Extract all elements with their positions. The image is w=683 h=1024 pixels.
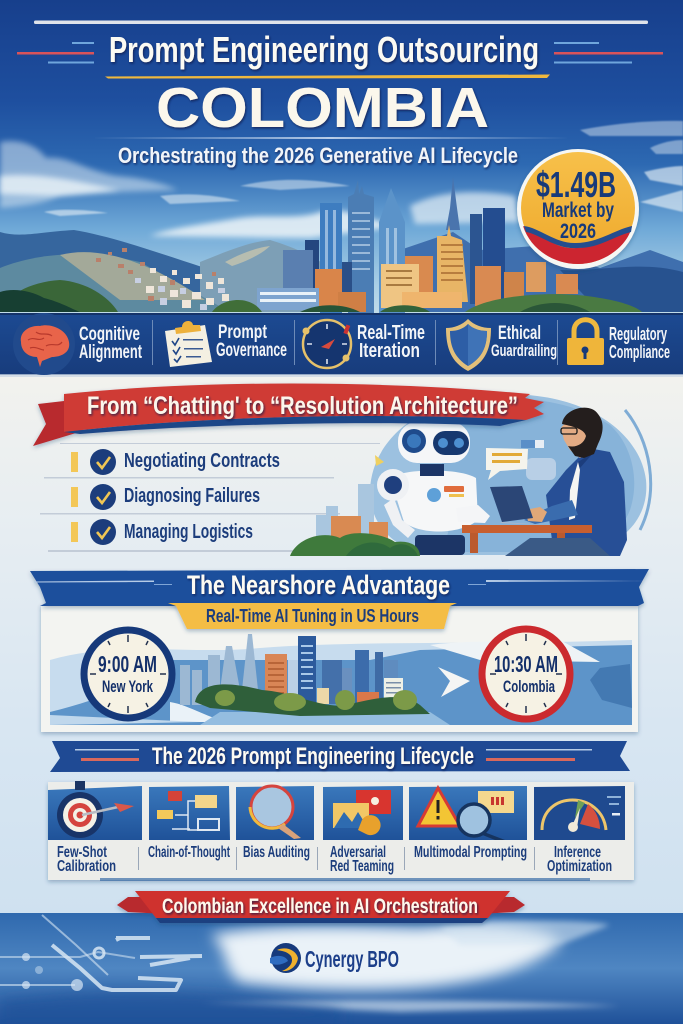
heading: nearshore advantage: The Nearshore Advantage: [187, 570, 450, 600]
banner: lifecycle heading: [50, 741, 630, 772]
label: Real-Time Iteration: Iteration: [359, 340, 420, 362]
panel: lifecycle card: [48, 782, 634, 880]
clock: Colombia: Colombia: [503, 677, 555, 696]
tile: few-shot calibration: Calibration: [57, 858, 116, 875]
label: Ethical Guardrailing: [491, 323, 557, 360]
market badge: $1.49B: [536, 164, 616, 205]
list item: managing logistics: Managing Logistics: [124, 521, 253, 543]
list item: diagnosing failures: Diagnosing Failures: [124, 485, 260, 507]
footer background: [0, 913, 683, 1024]
city skyline: [257, 177, 578, 313]
tile: inference optimization: [534, 786, 625, 875]
market badge: [517, 149, 639, 269]
clock: New York: 9:00 AM: [98, 651, 157, 677]
footer ribbon: [117, 891, 525, 923]
logo: Cynergy BPO: [270, 943, 399, 973]
list item: negotiating contracts: [71, 449, 280, 475]
tile: bias auditing: [236, 786, 314, 861]
panel: resolution architecture: [33, 384, 651, 556]
label: Prompt Governance: Prompt: [218, 322, 267, 343]
tile: adversarial red teaming: Adversarial: [330, 844, 386, 861]
tile: multimodal prompting: Multimodal Prompting: [414, 844, 527, 861]
clock: Colombia: [482, 629, 570, 719]
tile: few-shot calibration: Few-Shot: [57, 844, 107, 861]
circuit pattern: [0, 915, 202, 991]
icon: clipboard: [165, 321, 212, 367]
banner: red ribbon: [33, 384, 544, 446]
tile: adversarial red teaming: [323, 786, 403, 875]
clock: New York: [84, 630, 172, 718]
label: Prompt Governance: [216, 322, 287, 361]
tile: chain-of-thought: [148, 786, 230, 861]
background: hero sky: [0, 0, 683, 316]
icon: brain: [13, 313, 75, 375]
label: Ethical Guardrailing: Guardrailing: [491, 341, 557, 360]
label: Cognitive Alignment: Alignment: [79, 342, 142, 363]
title decorative lines: [17, 20, 663, 64]
feature band: [0, 313, 683, 377]
heading: country: COLOMBIA: [156, 76, 489, 140]
market badge: Market by: [542, 199, 614, 222]
mountains: [0, 230, 683, 312]
label: Real-Time Iteration: Real-Time: [357, 322, 425, 344]
title underline: [105, 74, 550, 78]
tile: few-shot calibration: [48, 781, 142, 875]
treeline: [0, 280, 642, 312]
footer heading: Colombian Excellence in AI Orchestration: [162, 895, 478, 918]
banner: yellow subtitle: Real-Time AI Tuning in US Hours: [206, 605, 419, 626]
label: Cognitive Alignment: Cognitive: [79, 324, 140, 345]
logo: Cynergy BPO: Cynergy BPO: [305, 946, 399, 972]
icon: padlock: [567, 320, 604, 365]
tile: inference optimization: Optimization: [547, 858, 612, 875]
tile: adversarial red teaming: Red Teaming: [330, 858, 394, 875]
icon: gauge timer: [302, 320, 351, 368]
label: Regulatory Compliance: [609, 324, 670, 362]
heading: lifecycle: The 2026 Prompt Engineering Lifecycle: [152, 743, 474, 770]
label: Real-Time Iteration: [357, 322, 425, 362]
hillside houses: [96, 248, 231, 310]
list item: diagnosing failures: [71, 484, 260, 510]
tile: bias auditing: Bias Auditing: [243, 844, 310, 861]
illustration: robot and engineer: [290, 394, 651, 556]
tile: chain-of-thought: Chain-of-Thought: [148, 844, 230, 861]
title: Prompt Engineering Outsourcing: [109, 29, 539, 70]
clock: Colombia: 10:30 AM: [494, 651, 558, 677]
tile: inference optimization: Inference: [554, 844, 601, 861]
clouds: [0, 121, 683, 238]
subtitle: Orchestrating the 2026 Generative AI Lifecycle: [118, 143, 518, 168]
panel: nearshore advantage: [30, 569, 649, 732]
list item: managing logistics: [71, 519, 253, 545]
panel: lifecycle: [48, 741, 634, 881]
background: paper section: [0, 375, 683, 915]
tile: multimodal prompting: [409, 786, 527, 861]
banner: nearshore heading: [30, 569, 649, 606]
subtitle rule: [91, 137, 570, 139]
market badge: 2026: [560, 220, 596, 243]
banner: yellow subtitle: [168, 603, 457, 629]
clock: New York: New York: [102, 677, 153, 696]
list item: negotiating contracts: Negotiating Contracts: [124, 450, 280, 472]
label: Prompt Governance: Governance: [216, 340, 287, 361]
heading: chatting to resolution: From “Chatting' to “Resolution Architecture”: [87, 392, 518, 420]
panel: scene frame: [41, 605, 638, 732]
icon: shield: [446, 319, 491, 371]
tile label dividers: [138, 847, 535, 870]
label: Ethical Guardrailing: Ethical: [498, 323, 541, 344]
list dividers: [40, 443, 380, 552]
label: Cognitive Alignment: [79, 324, 142, 363]
illustration: river city: [50, 634, 632, 725]
